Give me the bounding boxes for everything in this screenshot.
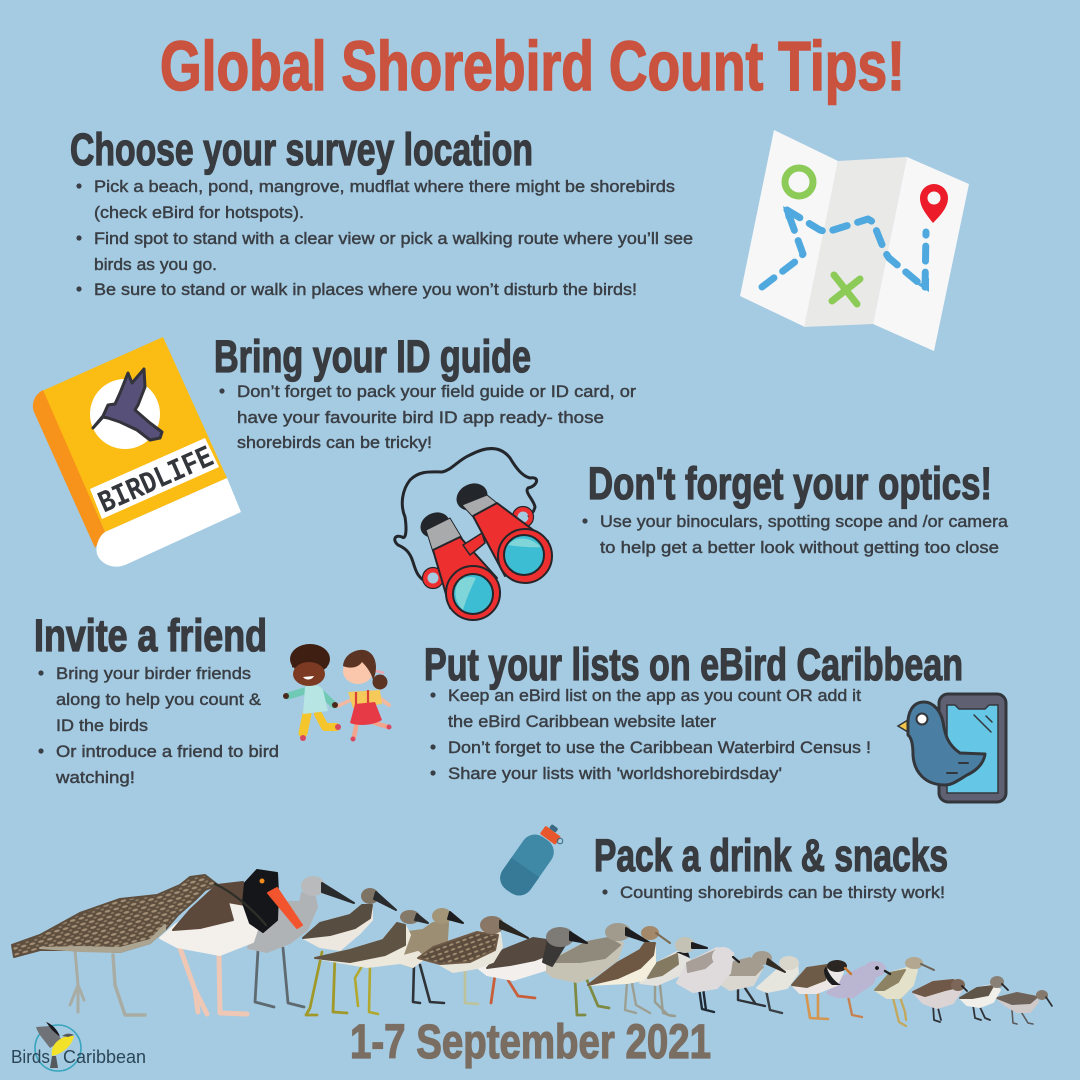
- bullet list: optics: Use your binoculars, spotting scope and /or camera: [600, 513, 1009, 531]
- icon: water bottle: [495, 824, 563, 901]
- logo: birdscaribbean: Caribbean: [63, 1047, 146, 1067]
- bullet list: snacks: Counting shorebirds can be thirsty work!: [620, 884, 945, 902]
- illustration: row of shorebirds: [12, 870, 1052, 1026]
- logo: birdscaribbean: Birds: [11, 1047, 50, 1067]
- bird: sandpiper 19: [960, 976, 1008, 1020]
- bird: brown dowitcher 7: [418, 916, 528, 1004]
- bullet list: id guide: Don’t forget to pack your field guide or ID card, or: [237, 383, 637, 401]
- bullet list: optics: to help get a better look without getting too close: [600, 539, 999, 557]
- panel: invite a friend: [34, 610, 279, 787]
- bird: grey sandpiper 9: [542, 923, 650, 1015]
- bullet list: invite: ID the birds: [56, 717, 148, 735]
- bullet list: ebird: [430, 687, 871, 783]
- bird: willet grey: [248, 876, 354, 1007]
- heading: invite: Invite a friend: [34, 610, 267, 661]
- icon: phone with bird: [898, 694, 1006, 802]
- icon: folded map with route: [740, 130, 969, 351]
- bullet list: optics: [582, 513, 1009, 557]
- bullet list: ebird: Share your lists with 'worldshorebirdsday': [448, 765, 782, 783]
- bullet list: ebird: Keep an eBird list on the app as you count OR add it: [448, 687, 861, 705]
- date line: 1-7 September 2021: [350, 1016, 711, 1069]
- bird: ruddy turnstone: [478, 927, 587, 1003]
- bullet list: id guide: have your favourite bird ID app ready- those: [237, 409, 604, 427]
- bullet list: invite: Or introduce a friend to bird: [56, 743, 279, 761]
- heading: id guide: Bring your ID guide: [214, 331, 531, 382]
- bird: knot right: [757, 956, 799, 1013]
- bullet list: id guide: [219, 383, 637, 452]
- panel: put your lists on ebird: [424, 639, 963, 783]
- icon: two children running: [283, 644, 392, 742]
- bird: yellowlegs back: [303, 888, 396, 1015]
- bullet list: invite: [38, 665, 279, 787]
- bird: sanderling: [677, 947, 739, 1012]
- panel: bring your id guide: [214, 331, 637, 452]
- bullet list: ebird: the eBird Caribbean website later: [448, 713, 717, 731]
- bird: knot 6: [400, 908, 463, 1003]
- bullet list: invite: Bring your birder friends: [56, 665, 251, 683]
- bullet list: invite: watching!: [55, 769, 135, 787]
- heading: snacks: Pack a drink & snacks: [594, 830, 948, 881]
- bird: brown sandpiper 10: [588, 926, 670, 1013]
- panel: don't forget your optics: [582, 458, 1009, 557]
- bird: whimbrel: [12, 875, 266, 1015]
- bird: sandpiper 18: [913, 979, 967, 1022]
- bird: ringed plover: [792, 960, 851, 1019]
- bullet list: location tips: Find spot to stand with a clear view or pick a walking route where you’ll see: [94, 230, 693, 248]
- bird: stint far right: [997, 990, 1052, 1024]
- panel: choose your survey location: [70, 124, 693, 299]
- bird: yellowlegs front: [315, 910, 428, 1014]
- bird: piping plover: [827, 961, 890, 1017]
- bird: knot left: [722, 951, 785, 1006]
- icon: hummingbird: [93, 369, 162, 440]
- bird: american oystercatcher: [160, 870, 302, 1014]
- bullet list: location tips: Be sure to stand or walk in places where you won’t disturb the birds!: [94, 281, 637, 299]
- bird: small collared sandpiper: [640, 937, 707, 1016]
- bird: sandpiper 17: [875, 957, 934, 1026]
- icon: birdlife field guide book: [33, 337, 241, 567]
- heading: choose location: Choose your survey location: [70, 124, 533, 175]
- bullet list: id guide: shorebirds can be tricky!: [237, 434, 432, 452]
- bullet list: location tips: [76, 178, 693, 299]
- panel: pack a drink and snacks: [594, 830, 948, 902]
- bullet list: invite: along to help you count &: [56, 691, 261, 709]
- bullet list: location tips: (check eBird for hotspots).: [94, 204, 304, 222]
- icon: binoculars: [395, 449, 552, 620]
- bullet list: location tips: Pick a beach, pond, mangrove, mudflat where there might be shorebirds: [94, 178, 675, 196]
- bullet list: ebird: Don’t forget to use the Caribbean Waterbird Census !: [448, 739, 871, 757]
- icon: birdlife field guide book: BIRDLIFE: [94, 440, 219, 522]
- logo: birdscaribbean: [11, 1022, 146, 1071]
- bullet list: location tips: birds as you go.: [94, 256, 217, 274]
